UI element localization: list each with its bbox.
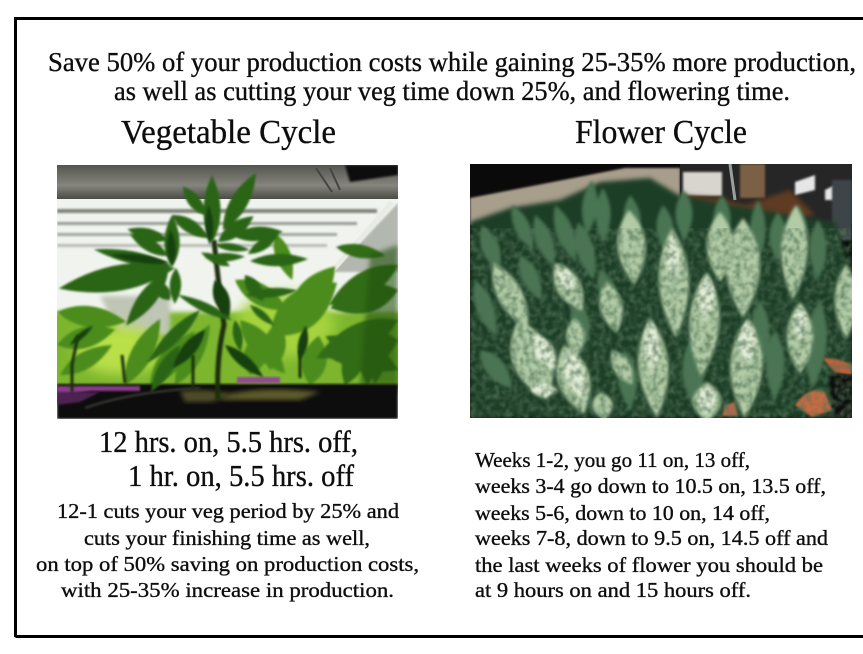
panel: flower cycle <box>467 114 857 602</box>
distant buds <box>467 179 830 411</box>
canopy texture <box>470 228 852 418</box>
pots and soil <box>822 358 852 375</box>
schedule: vegetable light cycle: 1 hr. on, 5.5 hrs. off <box>128 458 355 493</box>
text: vegetable cycle benefits <box>36 499 419 602</box>
photo: flowering canopy <box>467 164 857 422</box>
lower plant backdrop <box>50 312 405 392</box>
back foliage <box>57 234 338 384</box>
text: flower cycle weekly schedule: Weeks 1-2, you go 11 on, 13 off, <box>475 448 750 472</box>
main plant leaves <box>57 169 308 395</box>
photo: vegetative plants under lights <box>50 165 405 419</box>
headline: Save 50% of your production costs while gaining 25-35% more production, <box>48 47 856 77</box>
text: flower cycle weekly schedule: at 9 hours on and 15 hours off. <box>475 578 751 602</box>
heading: vegetable cycle: Vegetable Cycle <box>121 114 336 151</box>
heading: flower cycle: Flower Cycle <box>575 114 747 151</box>
foliage base <box>470 178 852 418</box>
text: vegetable cycle benefits: on top of 50% saving on production costs, <box>36 552 419 576</box>
headline: as well as cutting your veg time down 25%, and flowering time. <box>114 76 790 106</box>
text: flower cycle weekly schedule: the last weeks of flower you should be <box>475 553 823 577</box>
text: flower cycle weekly schedule: weeks 7-8, down to 9.5 on, 14.5 off and <box>475 526 829 550</box>
text: flower cycle weekly schedule: weeks 3-4 go down to 10.5 on, 13.5 off, <box>475 474 826 498</box>
right plant mass <box>316 242 398 384</box>
ground and purple mat <box>57 384 398 419</box>
text: vegetable cycle benefits: with 25-35% increase in production. <box>61 578 394 602</box>
stems <box>72 240 300 400</box>
text: flower cycle weekly schedule: weeks 5-6, down to 10 on, 14 off, <box>475 501 770 525</box>
text: flower cycle weekly schedule <box>475 448 829 602</box>
schedule: vegetable light cycle <box>99 424 358 493</box>
text: vegetable cycle benefits: cuts your finishing time as well, <box>84 526 370 550</box>
text: vegetable cycle benefits: 12-1 cuts your veg period by 25% and <box>57 499 400 523</box>
headline <box>48 47 856 106</box>
bright buds <box>482 205 857 422</box>
panel: vegetable cycle <box>36 114 419 602</box>
schedule: vegetable light cycle: 12 hrs. on, 5.5 hrs. off, <box>99 424 358 459</box>
